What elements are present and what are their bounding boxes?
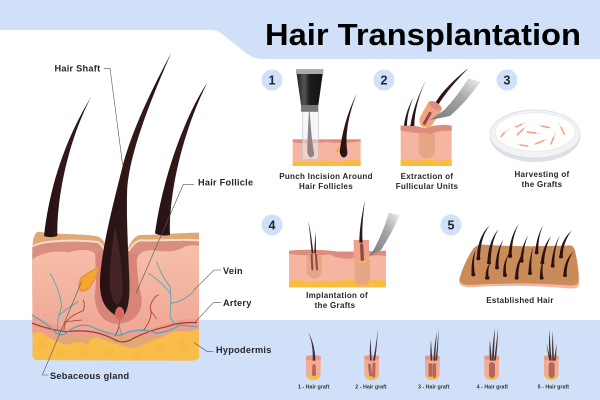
skin sample: [293, 139, 361, 166]
skin surface layer: [32, 232, 199, 361]
dermal papilla: [115, 307, 124, 320]
graft 2: [355, 328, 387, 390]
label: artery: Artery: [223, 298, 252, 308]
step 1 badge: [262, 70, 282, 90]
step 4 caption: [306, 291, 368, 310]
label: hair shaft: Hair Shaft: [54, 64, 100, 74]
step 5 badge: 5: [448, 218, 455, 232]
step 5 caption: Established Hair: [486, 296, 554, 305]
grafts: [501, 124, 564, 146]
yellow fat: [289, 280, 386, 287]
step 3 badge: 3: [504, 74, 511, 88]
graft 4: 4 - Hair graft: [477, 384, 508, 390]
graft tails: [504, 123, 560, 145]
graft 1: [298, 332, 330, 390]
step 4 caption: the Grafts: [315, 301, 356, 310]
skin top band: [401, 125, 452, 134]
step 3 caption: [514, 170, 570, 189]
step 4 badge: 4: [269, 218, 276, 232]
graft 1: 1 - Hair graft: [298, 384, 330, 390]
step 1 caption: Hair Follicles: [299, 182, 353, 191]
follicle sheath: [95, 250, 142, 324]
remaining hairs: [404, 80, 426, 126]
step 1 illustration: punch tool: [293, 69, 361, 166]
hairs: [471, 223, 573, 280]
hair bulb highlight: [110, 227, 123, 305]
skin anatomy diagram: [32, 53, 221, 375]
step 2 badge: [374, 70, 394, 90]
graft 4: [477, 328, 508, 390]
epidermis pale line: [32, 239, 199, 273]
step 4 caption: Implantation of: [306, 291, 368, 300]
deep dermis: [32, 315, 199, 337]
graft 5: 5 - Hair graft: [538, 384, 569, 390]
graft root: [357, 245, 367, 259]
step 3 caption: Harvesting of: [514, 170, 570, 179]
step 3 badge: [496, 70, 518, 90]
right socket: [355, 260, 370, 285]
step 4 illustration: implantation: [289, 200, 400, 287]
follicle hair: [340, 93, 357, 157]
scalp shadow: [459, 246, 579, 288]
graft 5: [538, 329, 569, 390]
graft 3: [418, 328, 450, 390]
dish rim: [490, 110, 580, 158]
step 3 caption: the Grafts: [522, 180, 563, 189]
implanted graft: [354, 240, 369, 264]
dish interior: [495, 113, 575, 151]
hair in tube: [307, 103, 314, 157]
label: hair follicle: Hair Follicle: [198, 178, 253, 188]
skin top band: [289, 250, 386, 259]
graft 3: 3 - Hair graft: [418, 384, 450, 390]
tweezers: [430, 78, 481, 120]
step 1 badge: 1: [269, 74, 276, 88]
leader lines: [42, 68, 221, 375]
left graft socket: [307, 255, 322, 278]
empty follicle hole: [419, 134, 435, 158]
tool collar: [301, 105, 318, 112]
sebaceous gland: [79, 266, 99, 291]
hypodermis: [33, 329, 199, 361]
gland: [335, 146, 339, 151]
tool cap: [296, 69, 323, 105]
bottom band: [0, 320, 600, 400]
tweezers: [369, 213, 400, 257]
header band: [0, 0, 600, 59]
step 5 illustration: established hair: [459, 223, 579, 288]
step 2 caption: Fullicular Units: [396, 182, 459, 191]
step 2 caption: Extraction of: [401, 172, 453, 181]
yellow fat: [401, 159, 452, 166]
hair right: [155, 83, 207, 236]
implanted hair: [359, 200, 365, 243]
skin section: [401, 125, 452, 166]
left graft roots: [312, 255, 317, 269]
scalp: [460, 245, 578, 285]
extracted graft: [420, 99, 443, 127]
label: hypodermis: Hypodermis: [216, 345, 272, 355]
dermis: [32, 245, 199, 333]
step 2 illustration: extraction: [401, 68, 481, 166]
label: sebaceous gland: Sebaceous gland: [50, 371, 129, 381]
vein: [32, 262, 197, 335]
dermis dark layer: [32, 241, 199, 293]
step 2 badge: 2: [381, 74, 388, 88]
step 1 caption: [279, 172, 373, 191]
glass tube: [302, 112, 318, 159]
step 4 badge: [262, 214, 282, 236]
artery: [32, 295, 197, 342]
step 1 caption: Punch Incision Around: [279, 172, 373, 181]
step 5 badge: [440, 214, 462, 236]
hair left: [44, 97, 91, 237]
left hairs: [308, 221, 316, 253]
hair centre shaft and bulb: [100, 53, 171, 315]
step 3 illustration: petri dish: [490, 110, 580, 162]
dish base: [490, 113, 580, 162]
label: vein: Vein: [223, 266, 243, 276]
graft fat edge: [355, 259, 369, 262]
graft 2: 2 - Hair graft: [355, 384, 387, 390]
skin section: [289, 250, 386, 287]
step 2 caption: [396, 172, 459, 191]
title: Hair Transplantation: [265, 17, 581, 52]
extracted hair: [434, 68, 468, 106]
hair graft row: [298, 328, 569, 390]
